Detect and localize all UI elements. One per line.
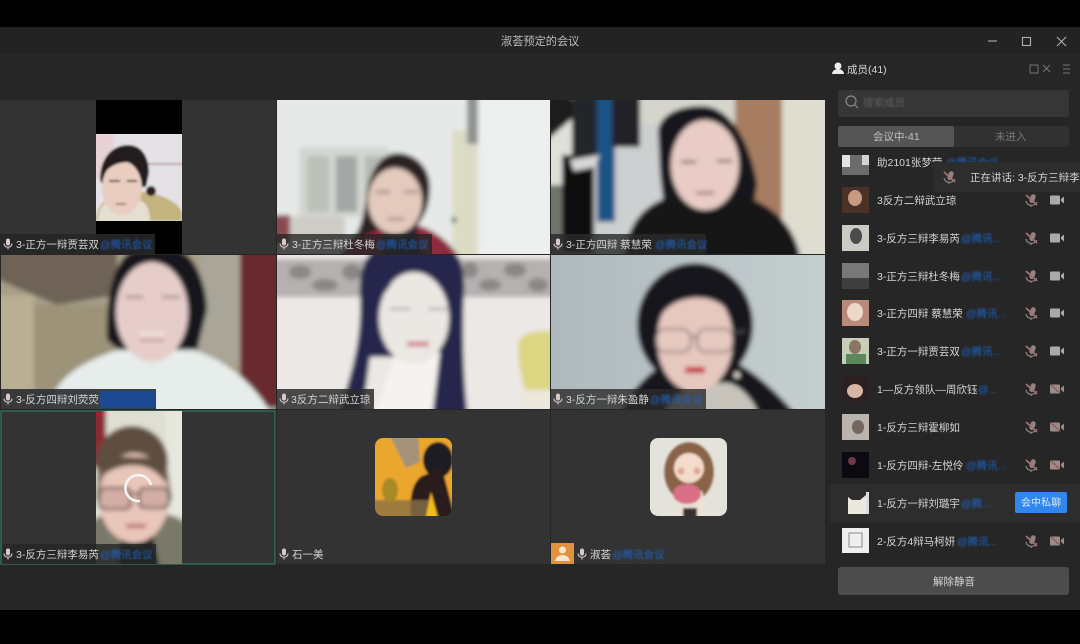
video: seated woman in beige hoodie [96, 134, 182, 221]
member row [842, 452, 1064, 478]
member row: 3-正方一辩贾芸双 [877, 345, 960, 358]
name label: @腾讯会议 [100, 548, 153, 561]
tile: 3-反方四辩刘荧荧 [1, 255, 276, 409]
tabs: 会议中-41 [873, 130, 920, 143]
member row: @腾讯会议 [946, 156, 999, 169]
search box: 搜索成员 [863, 96, 905, 109]
member row: 3-正方三辩杜冬梅 [877, 270, 960, 283]
name label [280, 548, 324, 561]
member row: hovered with private chat: @腾... [961, 497, 991, 510]
name label: 石一美 [292, 548, 324, 561]
search box [838, 90, 1069, 117]
name label: 3-正方三辩杜冬梅 [292, 238, 375, 251]
name label [551, 234, 708, 254]
name label [2, 544, 156, 564]
members heading: 成员(41) [847, 64, 887, 76]
meeting title: 淑荟预定的会议 [501, 34, 579, 48]
member row: hovered with private chat [848, 492, 1067, 514]
tile: 3-正方三辩杜冬梅 [277, 100, 550, 254]
member row: @腾讯... [961, 270, 1001, 283]
member row: @... [978, 384, 997, 396]
name label: 3-正方一辩贾芸双 [16, 238, 99, 251]
avatar: illustrated girl with flowers [650, 438, 727, 516]
name label: @腾讯会议 [650, 393, 703, 406]
member row: 3-反方三辩李易芮 [877, 232, 960, 245]
name label: @腾讯会议 [655, 238, 708, 251]
panel controls [1030, 65, 1070, 73]
name label: 3-反方四辩刘荧荧 [16, 393, 99, 406]
name label [551, 389, 706, 409]
name label [578, 548, 665, 561]
name label: 3-反方三辩李易芮 [16, 548, 99, 561]
name label: @腾讯会议 [376, 238, 429, 251]
member row: @腾讯... [957, 535, 997, 548]
member list [842, 155, 1067, 553]
button: private chat [1015, 492, 1067, 513]
tabs: 未进入 [995, 131, 1027, 143]
member row [842, 338, 1064, 364]
member row: 1—反方领队—周欣钰 [877, 383, 978, 396]
member row: @腾讯... [966, 459, 1006, 472]
member row: 1-反方四辩-左悦伶 [877, 459, 963, 472]
member row: @腾讯... [961, 232, 1001, 245]
avatar: orange silhouette [375, 438, 452, 516]
tile: 石一美 [277, 410, 550, 564]
tooltip: current speaker: 正在讲话: 3-反方三辩李 [970, 171, 1080, 184]
member row [842, 300, 1064, 326]
member row: @腾讯... [961, 345, 1001, 358]
member row [842, 187, 1064, 213]
member row: hovered with private chat: 1-反方一辩刘璐宇 [877, 497, 960, 510]
name label [277, 389, 374, 409]
member row: 3-正方四辩 蔡慧荣 [877, 307, 963, 320]
name label: 3-反方一辩朱盈静 [566, 393, 649, 406]
member row: 1-反方三辩霍柳如 [877, 421, 960, 434]
name label [277, 234, 432, 254]
member row [842, 263, 1064, 289]
tile: 淑荟 [551, 410, 825, 564]
button: unmute: 解除静音 [933, 575, 975, 588]
window controls [988, 37, 1066, 46]
panel: members sidebar [830, 62, 1080, 595]
member row [842, 155, 998, 175]
member row: 3反方二辩武立琼 [877, 194, 956, 207]
name label: 3-正方四辩 蔡慧荣 [566, 238, 652, 251]
member row [847, 383, 1064, 398]
tabs [838, 126, 1069, 147]
name label [0, 234, 155, 254]
name label: 3反方二辩武立琼 [291, 393, 370, 406]
tile: 3-反方三辩李易芮 (active speaker) [1, 405, 275, 570]
tooltip: current speaker [933, 162, 1080, 192]
members heading [832, 62, 887, 76]
name label: 淑荟 [590, 548, 611, 561]
tile: 3-正方四辩 蔡慧荣 [551, 100, 825, 254]
member row: 助2101张梦莹 [877, 156, 942, 169]
name label [1, 389, 156, 409]
member row: 2-反方4辩马柯妍 [877, 535, 956, 548]
tile: 3反方二辩武立琼 [277, 255, 550, 409]
member row: @腾讯... [966, 307, 1006, 320]
member row [842, 225, 1064, 251]
button: unmute [838, 567, 1069, 595]
title bar [0, 27, 1080, 55]
loading spinner [125, 475, 151, 501]
member row [842, 414, 1064, 440]
host avatar [551, 543, 574, 564]
member row [842, 528, 1064, 553]
name label: @腾讯会议 [100, 238, 153, 251]
name label: @腾讯会议 [612, 548, 665, 561]
tile: 3-反方一辩朱盈静 [551, 255, 825, 409]
button: private chat: 会中私聊 [1021, 496, 1061, 509]
tile: 3-正方一辩贾芸双 [0, 100, 276, 254]
